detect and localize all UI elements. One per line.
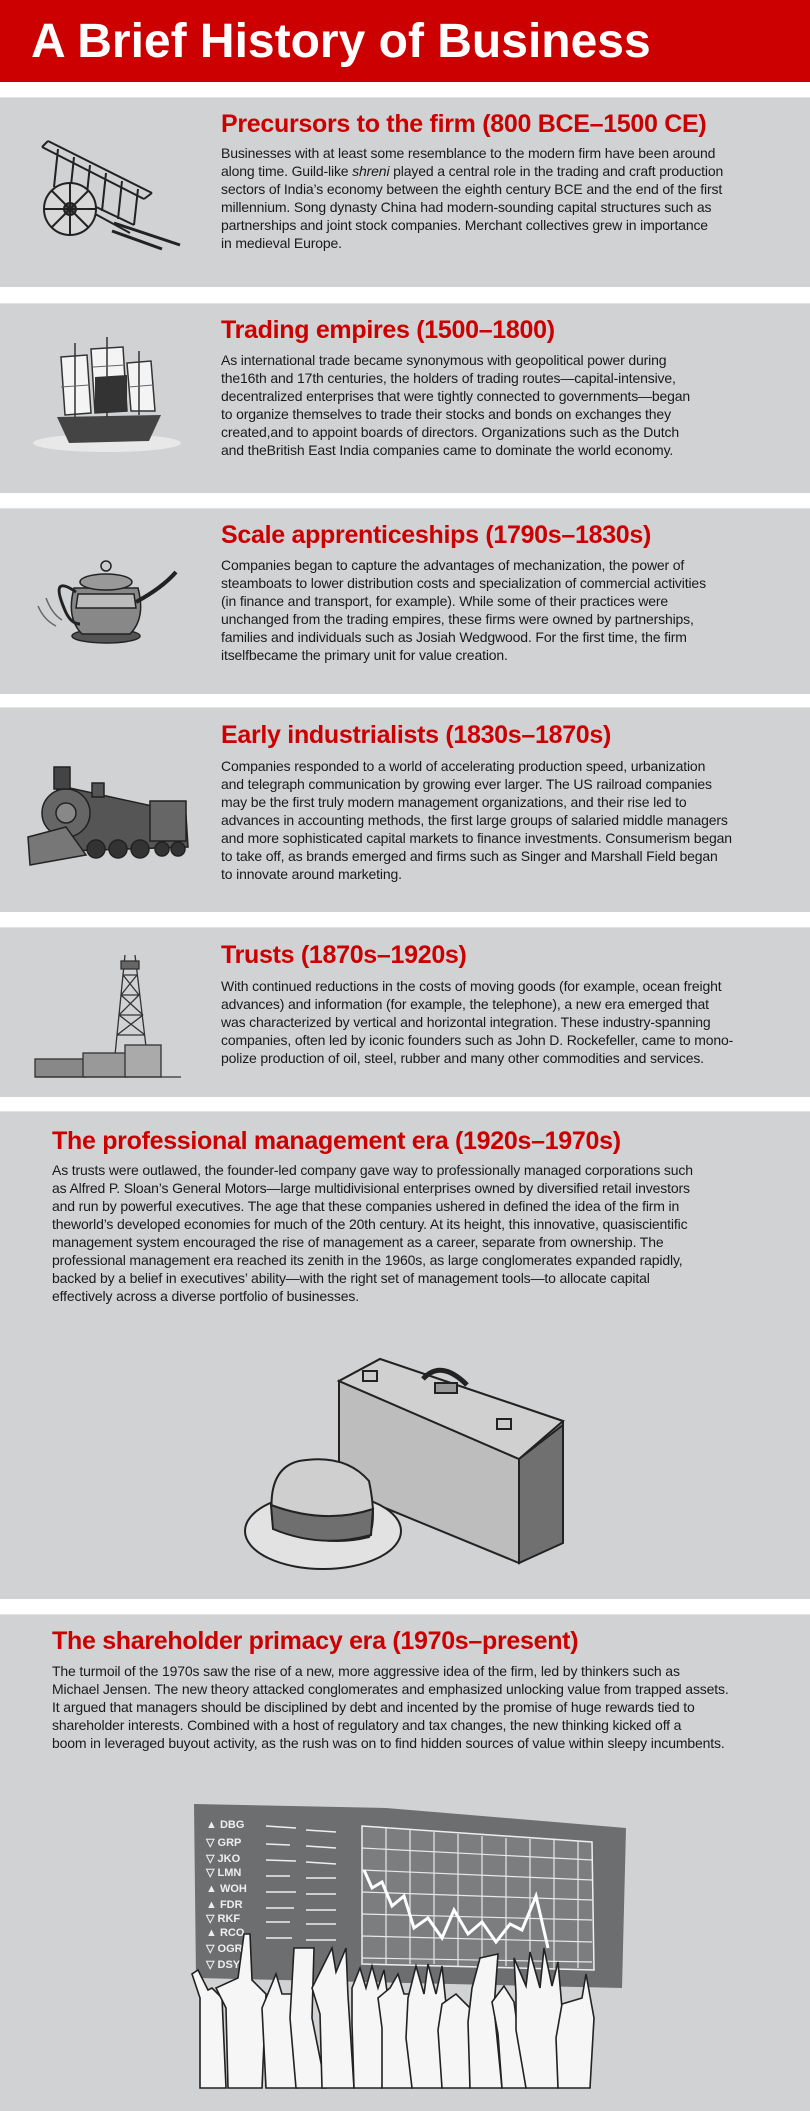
- stock board: ▽ LMN: [205, 1867, 241, 1879]
- icon: locomotive: [27, 766, 189, 866]
- icon: ship: [33, 337, 181, 452]
- heading: scale apprenticeships: Scale apprenticeships (1790s–1830s): [221, 521, 651, 549]
- text: trading empires: to organize themselves to trade their stocks and bonds on exchanges they: [221, 406, 671, 422]
- text: trading empires: As international trade became synonymous with geopolitical power during: [221, 352, 666, 368]
- text: professional management era: professional management era reached its zenith in the 1960s, as large conglomerates expanded rapidly,: [52, 1252, 683, 1268]
- text: trading empires: and theBritish East India companies came to dominate the world economy.: [221, 442, 673, 458]
- heading: trusts: Trusts (1870s–1920s): [221, 941, 467, 969]
- text: scale apprenticeships: steamboats to lower distribution costs and specialization of commercial activities: [221, 575, 706, 591]
- briefcase: [339, 1359, 563, 1563]
- heading: early industrialists: Early industrialists (1830s–1870s): [221, 721, 611, 749]
- text: early industrialists: to take off, as brands emerged and firms such as Singer and Marshall Field began: [221, 848, 718, 864]
- panel: trusts: [0, 927, 810, 1097]
- text: early industrialists: and telegraph communication by growing ever larger. The US railroad companies: [221, 776, 712, 792]
- stock board: ▽ RKF: [205, 1913, 240, 1925]
- text: trusts: companies, often led by iconic founders such as John D. Rockefeller, came to mono-: [221, 1032, 733, 1048]
- text: precursors: millennium. Song dynasty China had modern-sounding capital structures such as: [221, 199, 711, 215]
- stock board: ▽ JKO: [205, 1853, 241, 1865]
- text: shareholder primacy era: shareholder interests. Combined with a host of regulatory and tax changes, the new thinking kicked off a: [52, 1717, 681, 1733]
- text: trading empires: created,and to appoint boards of directors. Organizations such as the Dutch: [221, 424, 679, 440]
- text: professional management era: management system encouraged the rise of management as a career, separate from ownership. The: [52, 1234, 663, 1250]
- text: early industrialists: and more sophisticated capital markets to finance investments. Consumerism began: [221, 830, 732, 846]
- text: professional management era: theworld’s developed economies for much of the 20th century. At its height, this innovative, quasiscientific: [52, 1216, 687, 1232]
- title: A Brief History of Business: [31, 15, 651, 68]
- text: professional management era: backed by a belief in executives’ ability—with the right set of management tools—to allocate capital: [52, 1270, 650, 1286]
- text: precursors: partnerships and joint stock companies. Merchant collectives grew in importance: [221, 217, 708, 233]
- panel: professional management era: [0, 1111, 810, 1599]
- text: trading empires: the16th and 17th centuries, the holders of trading routes—capital-intensive,: [221, 370, 676, 386]
- text: professional management era: and run by powerful executives. The age that these companies ushered in defined the idea of the firm in: [52, 1198, 679, 1214]
- text: shareholder primacy era: Michael Jensen. The new theory attacked conglomerates and emphasized unlocking value from trapped assets.: [52, 1681, 729, 1697]
- text: trusts: With continued reductions in the costs of moving goods (for example, ocean freight: [221, 978, 722, 994]
- panel: trading empires: [0, 303, 810, 493]
- text: precursors: sectors of India’s economy between the eighth century BCE and the end of the first: [221, 181, 722, 197]
- text: early industrialists: advances in accounting methods, the first large groups of salaried middle managers: [221, 812, 728, 828]
- stock board: ▽ OGR: [205, 1943, 243, 1955]
- text: early industrialists: Companies responded to a world of accelerating production speed, urbanization: [221, 758, 705, 774]
- text: shareholder primacy era: boom in leveraged buyout activity, as the rush was on to find hidden sources of value within sleepy incumbents.: [52, 1735, 725, 1751]
- text: scale apprenticeships: families and individuals such as Josiah Wedgwood. For the first time, the firm: [221, 629, 687, 645]
- icon: teapot: [37, 560, 178, 644]
- stock board: ▽ DSY: [205, 1959, 241, 1971]
- text: scale apprenticeships: unchanged from the trading empires, these firms were owned by partnerships,: [221, 611, 694, 627]
- text: early industrialists: [221, 758, 732, 882]
- stock board: ▲ DBG: [206, 1819, 244, 1831]
- stock board: [194, 1804, 626, 1988]
- hat: [245, 1459, 401, 1569]
- panel: early industrialists: [0, 707, 810, 912]
- title bar: [0, 0, 810, 82]
- text: precursors: [221, 145, 723, 251]
- stock board: ▽ GRP: [205, 1837, 241, 1849]
- text: trading empires: decentralized enterprises that were tightly connected to governments—began: [221, 388, 690, 404]
- raised hands: [192, 1934, 594, 2088]
- heading: precursors: Precursors to the firm (800 BCE–1500 CE): [221, 110, 706, 138]
- text: precursors: Businesses with at least some resemblance to the modern firm have been around: [221, 145, 715, 161]
- text: professional management era: As trusts were outlawed, the founder-led company gave way to professionally managed corporations such: [52, 1162, 693, 1178]
- text: precursors: in medieval Europe.: [221, 235, 342, 251]
- text: shareholder primacy era: It argued that managers should be disciplined by debt and incented by the promise of huge rewards tied to: [52, 1699, 695, 1715]
- heading: trading empires: Trading empires (1500–1800): [221, 316, 555, 344]
- text: trusts: advances) and information (for example, the telephone), a new era emerged that: [221, 996, 709, 1012]
- text: trading empires: [221, 352, 690, 458]
- illustration: briefcase and hat: [244, 1358, 565, 1570]
- text: scale apprenticeships: Companies began to capture the advantages of mechanization, the power of: [221, 557, 684, 573]
- text: scale apprenticeships: (in finance and transport, for example). While some of their practices were: [221, 593, 668, 609]
- text: shareholder primacy era: [52, 1663, 729, 1751]
- text: trusts: was characterized by vertical and horizontal integration. These industry-spanning: [221, 1014, 711, 1030]
- panel: shareholder primacy era: [0, 1614, 810, 2111]
- illustration: stock board and raised hands: [191, 1804, 626, 2089]
- icon: cart: [41, 140, 180, 250]
- text: shareholder primacy era: The turmoil of the 1970s saw the rise of a new, more aggressive idea of the firm, led by thinkers such as: [52, 1663, 680, 1679]
- text: professional management era: [52, 1162, 693, 1304]
- heading: professional management era: The professional management era (1920s–1970s): [52, 1127, 621, 1155]
- text: professional management era: effectively across a diverse portfolio of businesses.: [52, 1288, 359, 1304]
- stock board: ▲ FDR: [206, 1899, 243, 1911]
- text: scale apprenticeships: [221, 557, 706, 663]
- text: trusts: [221, 978, 733, 1066]
- icon: oil derrick: [34, 954, 181, 1078]
- text: professional management era: as Alfred P. Sloan’s General Motors—large multidivisional enterprises owned by diversified retail investors: [52, 1180, 690, 1196]
- heading: shareholder primacy era: The shareholder primacy era (1970s–present): [52, 1627, 578, 1655]
- panel: scale apprenticeships: [0, 508, 810, 694]
- text: precursors: along time. Guild-like shreni played a central role in the trading and craft production: [221, 163, 723, 179]
- text: early industrialists: may be the first truly modern management organizations, and their rise led to: [221, 794, 686, 810]
- stock board: ▲ RCO: [206, 1927, 245, 1939]
- panel: precursors: [0, 97, 810, 287]
- stock board: ▲ WOH: [206, 1883, 247, 1895]
- text: early industrialists: to innovate around marketing.: [221, 866, 402, 882]
- text: scale apprenticeships: itselfbecame the primary unit for value creation.: [221, 647, 508, 663]
- text: trusts: polize production of oil, steel, rubber and many other commodities and services.: [221, 1050, 704, 1066]
